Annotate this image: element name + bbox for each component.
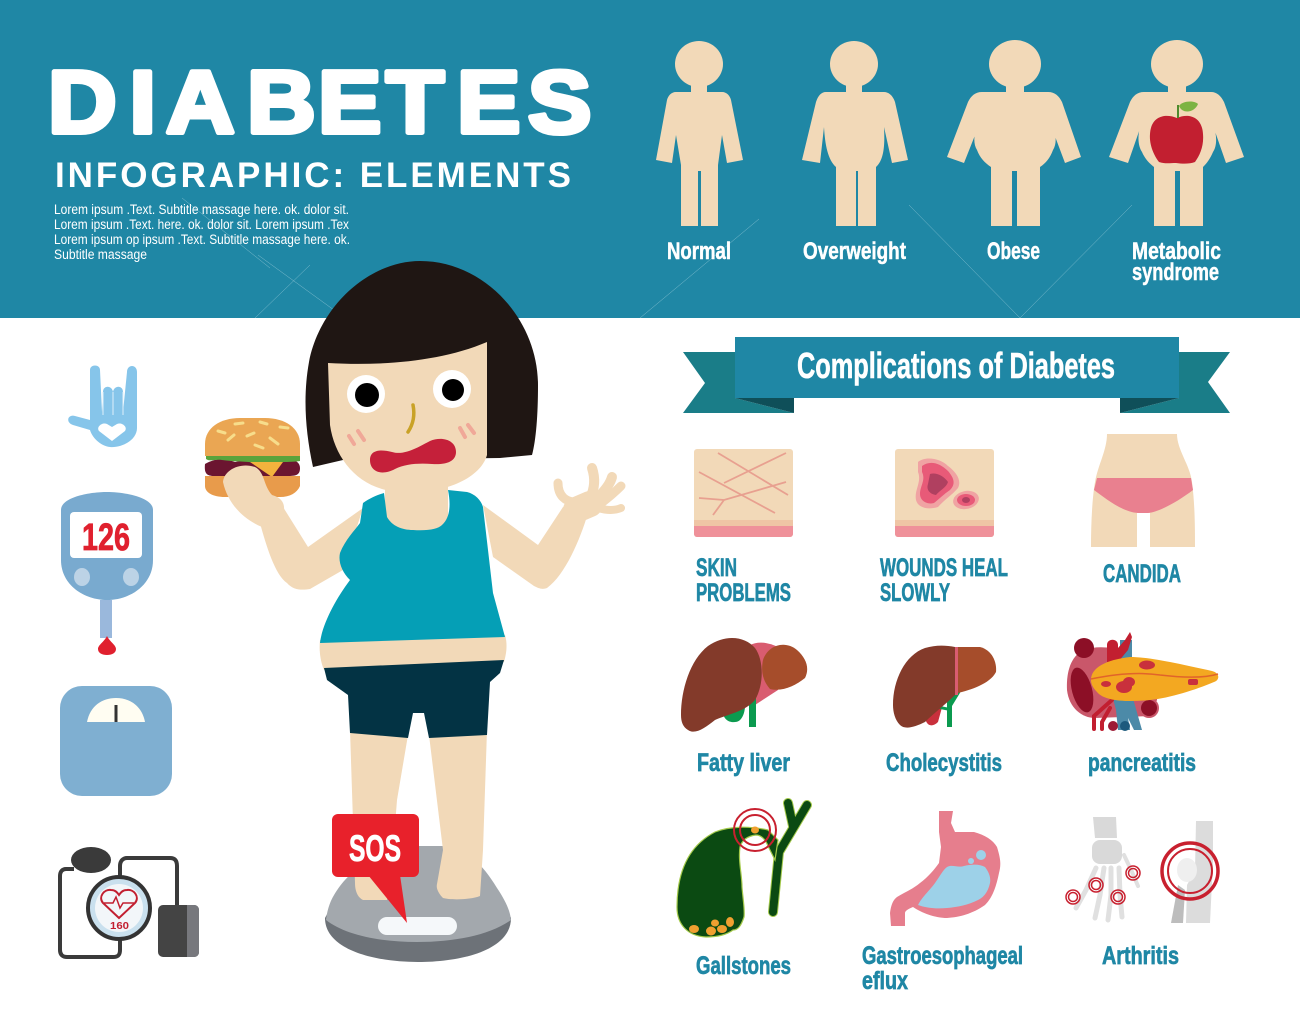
label: gastroesophageal reflux [862,942,1023,995]
reading: 126: 126 [82,517,130,559]
intro text block: Lorem ipsum .Text. here. ok. dolor sit. Lorem ipsum .Tex [54,217,349,232]
tank top [320,490,505,643]
icon: candida [1091,434,1195,547]
icon: fatty liver [681,638,807,732]
header banner [0,0,1300,318]
legs [350,730,408,900]
belly [320,635,507,670]
label: wounds heal slowly: WOUNDS HEAL [880,554,1008,582]
icon: gallstones [677,803,807,937]
label: fatty liver: Fatty liver [697,749,790,777]
label: gastroesophageal reflux: eflux [862,967,908,995]
label: metabolic syndrome [1132,238,1221,286]
neck and face [385,480,448,535]
SOS callout [332,814,419,923]
body figure: metabolic syndrome [1109,40,1244,226]
label: skin problems [696,554,791,607]
label: normal: Normal [667,238,731,265]
weighing scale under feet [325,846,511,962]
icon: skin problems [694,449,793,537]
label: arthritis: Arthritis [1102,942,1179,970]
icon: blood pressure monitor [60,847,199,957]
label: skin problems: SKIN [696,554,737,582]
label: obese: Obese [987,238,1040,265]
fist [223,465,284,527]
label: wounds heal slowly: SLOWLY [880,579,950,607]
icon: pancreatitis [1066,632,1218,731]
burger [205,418,300,497]
body figure: normal [656,41,743,226]
icon: arthritis hand [1066,817,1140,920]
left arm [260,507,363,590]
icon: bathroom scale [60,686,172,796]
icon: cholecystitis [893,646,996,728]
intro text block [54,202,350,262]
label: metabolic syndrome: Metabolic [1132,238,1221,265]
body figure: obese [947,40,1081,226]
label: candida: CANDIDA [1103,560,1181,588]
label: cholecystitis: Cholecystitis [886,749,1002,777]
label: skin problems: PROBLEMS [696,579,791,607]
intro text block: Subtitle massage [54,247,147,262]
icon: wounds [895,449,994,537]
heading text: Complications of Diabetes [797,345,1115,386]
label: gallstones: Gallstones [696,952,791,980]
shorts [324,660,504,738]
icon: arthritis knee [1162,821,1218,923]
cheeks [349,425,474,444]
icon: hand sign [68,366,137,447]
subtitle: INFOGRAPHIC: ELEMENTS [55,156,571,195]
icon: stomach [890,811,1000,926]
nose [408,405,414,432]
label: metabolic syndrome: syndrome [1132,259,1219,286]
hair [306,261,538,467]
label: pancreatitis: pancreatitis [1088,749,1196,777]
SOS text: SOS [349,828,401,869]
icon: blood pressure monitor: 160 [110,921,129,932]
label: wounds heal slowly [880,554,1008,607]
intro text block: Lorem ipsum .Text. Subtitle massage here. ok. dolor sit. [54,202,349,217]
title: DIABETES [48,54,591,152]
mouth [370,439,456,472]
intro text block: Lorem ipsum op ipsum .Text. Subtitle massage here. ok. [54,232,350,247]
character: woman with burger [205,261,621,900]
right arm [483,505,588,589]
label: overweight: Overweight [803,238,906,265]
label: gastroesophageal reflux: Gastroesophageal [862,942,1023,970]
waving hand [558,468,621,510]
eyes [347,370,471,413]
ribbon: complications heading [683,337,1230,413]
icon: red apple [1150,102,1203,164]
body figure: overweight [802,41,908,226]
icon: glucose meter [61,492,153,655]
